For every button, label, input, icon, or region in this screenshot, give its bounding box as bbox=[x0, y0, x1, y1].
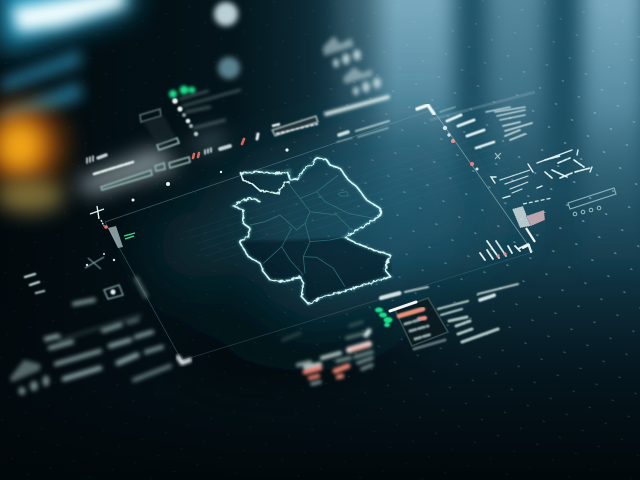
card white bar bbox=[390, 302, 416, 311]
barcode legend bbox=[108, 226, 123, 248]
table salmon cells bbox=[305, 346, 368, 378]
list text bars bbox=[180, 90, 240, 128]
right panel: bar chart bbox=[480, 241, 531, 260]
blurred light: bright highlight bbox=[12, 0, 126, 32]
blurred light: white haze behind header labels bbox=[72, 128, 224, 194]
top-centre icon cluster (blurred) bbox=[323, 36, 381, 96]
blurred light: blue bars bbox=[0, 50, 82, 124]
blurred foreground lights, upper left bbox=[0, 0, 240, 213]
right panel: small cross icon bbox=[495, 153, 501, 159]
left corner cross and legend bbox=[90, 206, 135, 248]
map: Germany outline glow bbox=[233, 157, 391, 304]
bracket label box bbox=[272, 116, 318, 136]
right panel: scatter box bbox=[537, 150, 592, 178]
green status dots bbox=[375, 308, 392, 327]
right text rows bbox=[438, 301, 498, 342]
right panel: barcode block bbox=[512, 198, 552, 242]
right panel: markers on frame edge bbox=[443, 126, 478, 170]
blurred light: orange glow bbox=[0, 105, 62, 185]
table side tag bbox=[366, 331, 369, 335]
three mini tables bbox=[283, 322, 372, 384]
frame of map panel bbox=[105, 92, 535, 361]
background: light vertical streaks bbox=[332, 0, 640, 340]
top header labels bbox=[337, 121, 389, 142]
card outline bbox=[395, 298, 448, 346]
right panel: text blocks bbox=[440, 107, 532, 148]
card salmon bars bbox=[399, 309, 425, 319]
crosshair bbox=[90, 206, 104, 226]
bottom card title labels bbox=[381, 284, 518, 300]
card text rows bbox=[405, 319, 445, 349]
green legend bbox=[124, 233, 135, 239]
table headers bbox=[298, 344, 369, 367]
blurred orbs at top bbox=[214, 2, 240, 79]
cross icon bbox=[85, 257, 104, 269]
right panel: bracketed text box bbox=[491, 164, 542, 198]
lower left panel: short dashes bbox=[25, 274, 44, 293]
top header bar bbox=[326, 97, 388, 114]
outlined card bbox=[390, 298, 448, 349]
header strip, top left of panel bbox=[87, 86, 318, 202]
right panel: chart markers bbox=[496, 252, 507, 258]
red markers bbox=[193, 139, 244, 158]
white list bullets bbox=[172, 98, 198, 136]
dark connector block between pills bbox=[143, 116, 176, 145]
green status dots bbox=[169, 86, 195, 98]
header ticks and labels bbox=[87, 134, 258, 174]
bottom panel: central cards bbox=[283, 284, 518, 384]
map: Germany outline bbox=[233, 157, 391, 304]
right panel: outline progress bar bbox=[568, 188, 616, 209]
target icon bbox=[104, 285, 123, 299]
cross dots bbox=[86, 253, 115, 266]
blurred light: lower amber glow bbox=[0, 179, 64, 213]
map panel glow bbox=[155, 115, 510, 369]
lower left panel: blurred icon cluster bbox=[10, 360, 50, 395]
map: dark land fill bbox=[239, 237, 391, 304]
blurred light: cyan bar bbox=[0, 0, 134, 52]
map: German state borders bbox=[250, 175, 373, 287]
frame corners bbox=[178, 105, 531, 363]
lower left panel: blurred text bars bbox=[46, 278, 170, 380]
outlined status pills bbox=[101, 109, 190, 190]
red marker bbox=[104, 225, 108, 229]
table grey cells bbox=[283, 322, 372, 384]
frame markers on top edge bbox=[132, 148, 289, 202]
right panel: row of circles bbox=[573, 206, 601, 216]
scan lines across map bbox=[185, 128, 520, 262]
lower left panel: cross and target icons bbox=[85, 253, 123, 299]
